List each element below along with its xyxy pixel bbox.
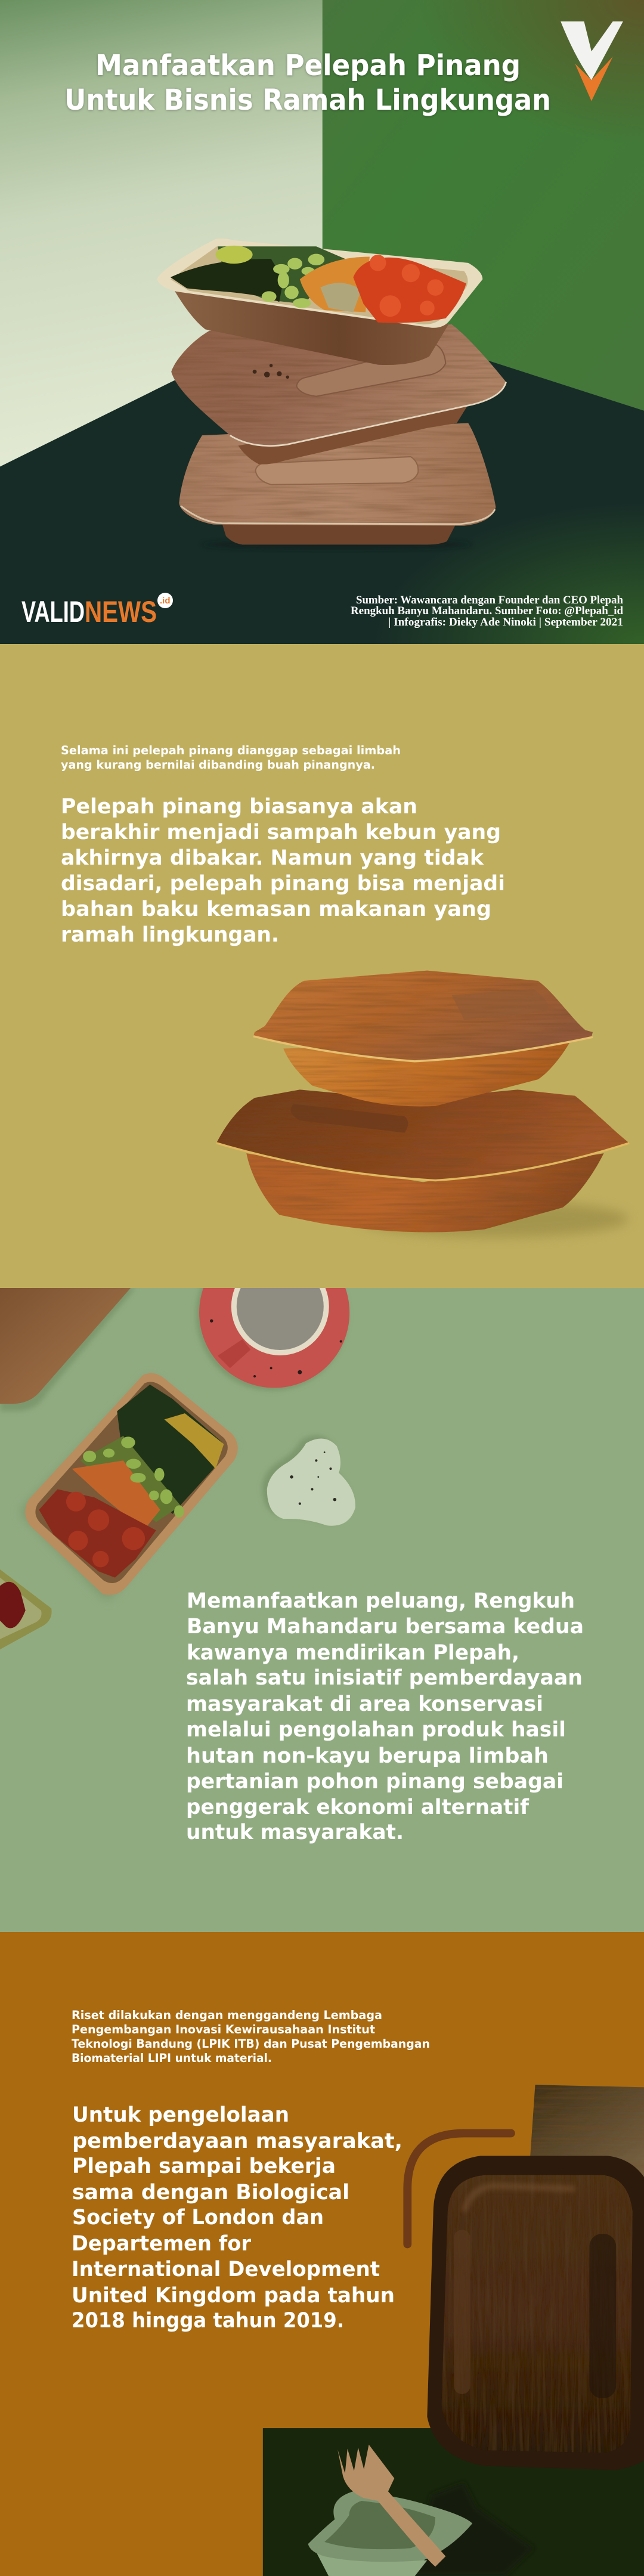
body text bbox=[61, 795, 505, 947]
food tray bbox=[20, 1373, 238, 1600]
body text: melalui pengolahan produk hasil bbox=[186, 1718, 566, 1742]
body text: penggerak ekonomi alternatif bbox=[186, 1795, 530, 1819]
body text: Pelepah pinang biasanya akan bbox=[61, 795, 417, 819]
source credits: Rengkuh Banyu Mahandaru. Sumber Foto: @Plepah_id bbox=[351, 605, 623, 617]
logo: Validnews wordmark: NEWS bbox=[85, 595, 157, 628]
body text: bahan baku kemasan makanan yang bbox=[61, 897, 491, 921]
photo collage: tray, leaf, fork and dish bbox=[263, 2085, 644, 2576]
panel: hero photo bbox=[0, 0, 644, 644]
body text: Banyu Mahandaru bersama kedua bbox=[187, 1615, 584, 1639]
panel: palm-leaf waste bbox=[0, 644, 644, 1288]
section background bbox=[0, 1288, 644, 1932]
intro text bbox=[61, 744, 401, 772]
intro text: Pengembangan Inovasi Kewirausahaan Institut bbox=[72, 2023, 375, 2036]
body text: ramah lingkungan. bbox=[61, 923, 279, 947]
intro text: yang kurang bernilai dibanding buah pinangnya. bbox=[61, 758, 375, 772]
section background bbox=[0, 1932, 644, 2576]
body text: berakhir menjadi sampah kebun yang bbox=[61, 821, 501, 844]
body text bbox=[72, 2103, 402, 2333]
lower box bbox=[216, 1089, 629, 1233]
panel: research and partnerships bbox=[0, 1932, 644, 2576]
logo: Validnews wordmark: .id bbox=[160, 596, 171, 606]
source credits: Sumber: Wawancara dengan Founder dan CEO Plepah bbox=[356, 594, 623, 606]
source credits: | Infografis: Dieky Ade Ninoki | September 2021 bbox=[388, 616, 623, 628]
intro text: Riset dilakukan dengan menggandeng Lembaga bbox=[72, 2008, 382, 2022]
body text: Society of London dan bbox=[72, 2206, 324, 2230]
body text: 2018 hingga tahun 2019. bbox=[72, 2309, 344, 2333]
body text: salah satu inisiatif pemberdayaan bbox=[186, 1666, 583, 1690]
upper box bbox=[253, 971, 593, 1106]
sauce bowl bbox=[0, 1569, 52, 1649]
body text: akhirnya dibakar. Namun yang tidak bbox=[61, 846, 484, 870]
body text: kawanya mendirikan Plepah, bbox=[187, 1641, 519, 1665]
body text: untuk masyarakat. bbox=[186, 1820, 404, 1844]
intro text: Selama ini pelepah pinang dianggap sebagai limbah bbox=[61, 744, 401, 757]
dark green block bbox=[263, 2428, 644, 2576]
top tray with food bbox=[157, 239, 482, 365]
body text: pemberdayaan masyarakat, bbox=[72, 2129, 402, 2153]
body text bbox=[186, 1589, 584, 1844]
logo: Validnews wordmark: VALID bbox=[21, 595, 85, 628]
source credits bbox=[351, 594, 623, 628]
palm leaf bbox=[530, 2085, 644, 2178]
red cup and saucer bbox=[196, 1288, 349, 1391]
intro text: Biomaterial LIPI untuk material. bbox=[72, 2051, 272, 2065]
brown curved accent bbox=[407, 2134, 511, 2244]
wooden board bbox=[0, 1288, 135, 1411]
body text: hutan non-kayu berupa limbah bbox=[186, 1744, 549, 1768]
photo: two stacked palm-leaf boxes bbox=[216, 971, 629, 1237]
body text: Untuk pengelolaan bbox=[72, 2103, 289, 2127]
panel: founding of Plepah bbox=[0, 1237, 644, 1932]
background: corner walls and floor bbox=[0, 0, 644, 644]
body text: Departemen for bbox=[72, 2232, 252, 2256]
middle box bbox=[171, 324, 506, 465]
speckled dish bbox=[262, 1435, 355, 1526]
bottom box bbox=[179, 423, 496, 544]
logo: Validnews wordmark bbox=[21, 593, 173, 628]
intro text: Teknologi Bandung (LPIK ITB) dan Pusat Pengembangan bbox=[72, 2037, 430, 2051]
section background bbox=[0, 644, 644, 1288]
icon: V brand logo bbox=[561, 21, 623, 101]
body text: United Kingdom pada tahun bbox=[72, 2284, 395, 2308]
wooden fork bbox=[338, 2445, 445, 2566]
body text: Memanfaatkan peluang, Rengkuh bbox=[187, 1589, 575, 1613]
body text: International Development bbox=[72, 2258, 380, 2281]
body text: Plepah sampai bekerja bbox=[72, 2154, 336, 2178]
speckled dish bbox=[308, 2491, 472, 2576]
body text: sama dengan Biological bbox=[72, 2181, 349, 2205]
photo: stacked palm-leaf food boxes bbox=[157, 239, 506, 550]
body text: masyarakat di area konservasi bbox=[186, 1692, 543, 1716]
photo: flat-lay table setting bbox=[0, 1237, 355, 1649]
title: Manfaatkan Pelepah Pinang bbox=[95, 49, 521, 82]
title bbox=[64, 49, 551, 117]
title: Untuk Bisnis Ramah Lingkungan bbox=[64, 83, 551, 117]
dark wooden tray bbox=[427, 2156, 644, 2470]
dish shadow bbox=[416, 2485, 532, 2575]
intro text bbox=[72, 2008, 430, 2065]
body text: pertanian pohon pinang sebagai bbox=[186, 1770, 564, 1794]
body text: disadari, pelepah pinang bisa menjadi bbox=[61, 872, 505, 896]
